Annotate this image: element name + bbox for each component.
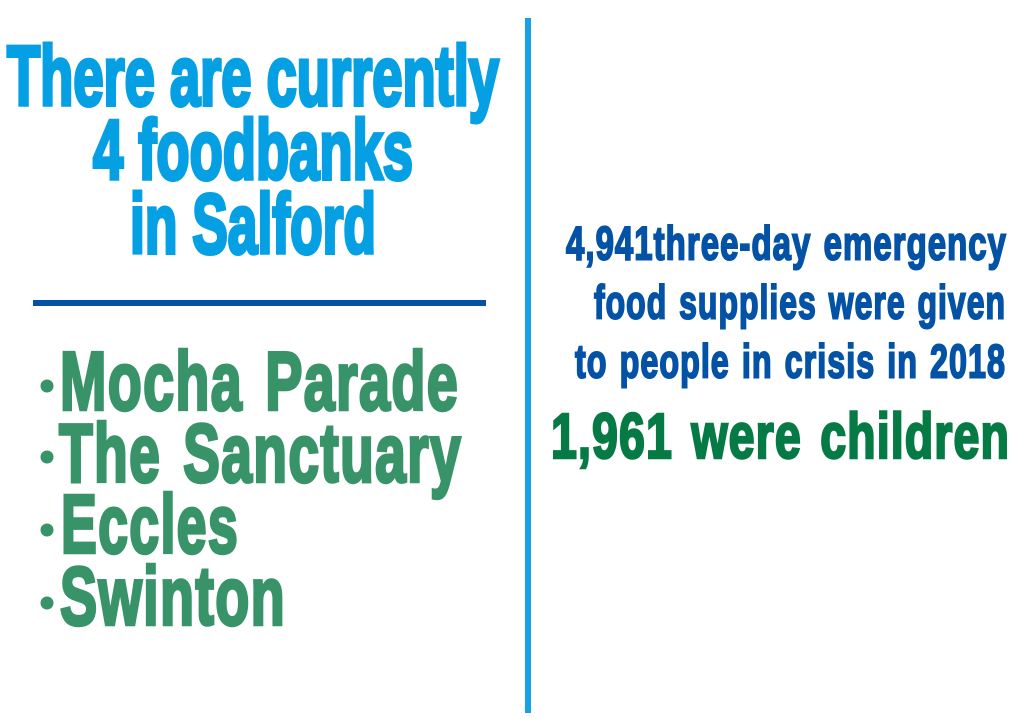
list item: Mocha Parade bbox=[40, 334, 459, 428]
list item: Swinton bbox=[40, 550, 286, 642]
heading: foodbanks in Salford: in Salford bbox=[130, 177, 376, 271]
list item: Mocha Parade: Mocha Parade bbox=[60, 334, 459, 428]
list: foodbank locations bbox=[40, 334, 462, 642]
list item: Swinton: Swinton bbox=[60, 550, 286, 642]
divider: horizontal rule bbox=[33, 300, 486, 306]
list item: The Sanctuary bbox=[40, 406, 462, 500]
list item: Eccles bbox=[40, 478, 239, 570]
list item: The Sanctuary: The Sanctuary bbox=[59, 406, 462, 500]
list item: Eccles: Eccles bbox=[61, 478, 239, 570]
heading: foodbanks in Salford bbox=[7, 29, 499, 271]
text block: emergency food supplies bbox=[566, 216, 1007, 388]
heading: foodbanks in Salford: There are currently bbox=[7, 29, 499, 123]
divider: vertical rule bbox=[525, 18, 531, 713]
heading: foodbanks in Salford: 4 foodbanks bbox=[93, 103, 413, 197]
